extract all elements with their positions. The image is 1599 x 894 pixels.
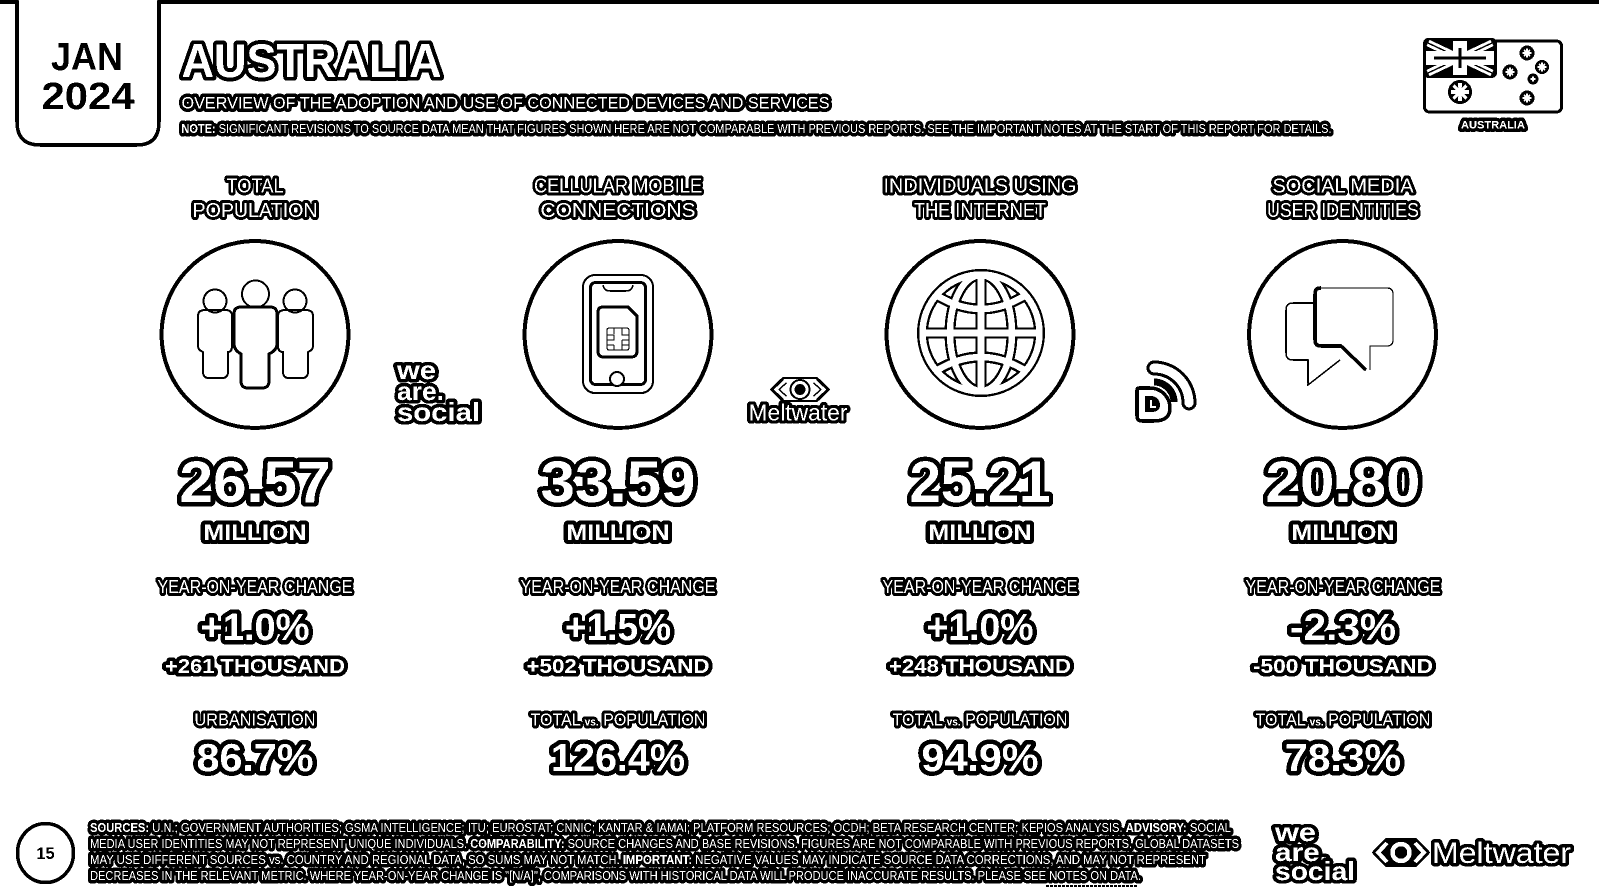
icon: speech bubbles bbox=[1249, 241, 1436, 428]
logo: we are social footer: are. bbox=[1275, 837, 1328, 867]
heading: social media user identities bbox=[1267, 174, 1419, 222]
change absolute: +261 THOUSAND bbox=[165, 655, 345, 678]
label: urbanisation: URBANISATION bbox=[194, 710, 316, 730]
heading: social media user identities: SOCIAL MEDIA bbox=[1272, 174, 1414, 198]
footer sources and notes: MAY USE DIFFERENT SOURCES vs. COUNTRY AND REGIONAL DATA, SO SUMS MAY NOT MATCH. IMPORTANT: NEGATIVE VALUES MAY INDICATE SOURCE DATA CORRECTIONS, AND MAY NOT REPRESENT bbox=[90, 852, 1206, 867]
title: AUSTRALIA bbox=[182, 34, 442, 87]
page number: 15 bbox=[36, 845, 55, 863]
figure: total population: 26.57 bbox=[180, 450, 330, 515]
logo: meltwater eye and wordmark: Meltwater bbox=[748, 400, 848, 426]
heading: cellular mobile connections: CELLULAR MOBILE bbox=[534, 174, 702, 198]
heading: individuals using the internet: THE INTERNET bbox=[914, 199, 1046, 222]
change absolute: -500 THOUSAND bbox=[1253, 655, 1433, 678]
logo: meltwater footer: Meltwater bbox=[1432, 837, 1571, 870]
date tab: JAN bbox=[51, 36, 123, 79]
urbanisation value: 86.7% bbox=[196, 737, 314, 780]
footer sources and notes: DECREASES IN THE RELEVANT METRIC. WHERE YEAR-ON-YEAR CHANGE IS "[N/A]", COMPARISONS WITH HISTORICAL DATA WILL PRODUCE INACCURATE RESULTS. PLEASE SEE NOTES ON DATA. bbox=[90, 868, 1141, 883]
date tab: 2024 bbox=[42, 76, 134, 118]
total vs population value: 94.9% bbox=[922, 737, 1038, 780]
icon: globe bbox=[886, 241, 1074, 428]
label: year-on-year: YEAR-ON-YEAR CHANGE bbox=[158, 576, 352, 597]
unit: MILLION bbox=[928, 520, 1032, 545]
heading: individuals using the internet: INDIVIDUALS USING bbox=[884, 174, 1076, 198]
figure: social media users: 20.80 bbox=[1266, 450, 1420, 515]
icon: australian flag bbox=[1423, 38, 1562, 112]
heading: total population: TOTAL bbox=[226, 174, 284, 198]
icon: people bbox=[162, 241, 348, 428]
change percent: -2.3% bbox=[1290, 607, 1396, 649]
heading: individuals using the internet bbox=[884, 174, 1076, 222]
heading: cellular mobile connections bbox=[534, 174, 702, 222]
label: total vs population: TOTAL vs. POPULATION bbox=[1256, 710, 1430, 730]
logo: we are social footer bbox=[1274, 817, 1355, 886]
label: total vs population: TOTAL vs. POPULATION bbox=[530, 710, 706, 730]
footer sources and notes: MEDIA USER IDENTITIES MAY NOT REPRESENT UNIQUE INDIVIDUALS. COMPARABILITY: SOURCE CHANGES AND BASE REVISIONS. FIGURES ARE NOT COMPARABLE WITH PREVIOUS REPORTS. GLOBAL DATASETS bbox=[90, 836, 1239, 851]
footer sources and notes: SOURCES: U.N.; GOVERNMENT AUTHORITIES; GSMA INTELLIGENCE; ITU; EUROSTAT; CNNIC; KANTAR & IAMAI; PLATFORM RESOURCES; OCDH; BETA RESEARCH CENTER; KEPIOS ANALYSIS. ADVISORY: SOCIAL bbox=[90, 820, 1231, 835]
panel: individuals using the internet bbox=[882, 174, 1078, 780]
logo: we are social: we bbox=[396, 355, 436, 385]
heading: social media user identities: USER IDENTITIES bbox=[1267, 199, 1419, 222]
heading: total population: POPULATION bbox=[192, 199, 318, 222]
unit: MILLION bbox=[1292, 520, 1394, 545]
unit: MILLION bbox=[566, 520, 670, 545]
date tab bbox=[0, 2, 1599, 145]
figure: mobile connections: 33.59 bbox=[540, 450, 696, 515]
label: year-on-year: YEAR-ON-YEAR CHANGE bbox=[882, 576, 1078, 597]
logo: we are social: social bbox=[397, 397, 480, 427]
logo: we are social bbox=[396, 355, 480, 427]
total vs population value: 126.4% bbox=[551, 737, 685, 780]
logo: we are social footer: social bbox=[1275, 856, 1355, 886]
icon: phone with SIM bbox=[524, 241, 712, 428]
panel: social media user identities bbox=[1246, 174, 1440, 780]
logo: meltwater footer bbox=[1373, 837, 1571, 870]
heading: cellular mobile connections: CONNECTIONS bbox=[540, 199, 696, 222]
flag label: AUSTRALIA bbox=[1461, 120, 1525, 132]
label: year-on-year: YEAR-ON-YEAR CHANGE bbox=[520, 576, 716, 597]
panel: total population bbox=[158, 174, 352, 780]
logo: meltwater eye and wordmark bbox=[748, 378, 848, 426]
change percent: +1.5% bbox=[565, 607, 671, 649]
unit: MILLION bbox=[204, 520, 306, 545]
figure: internet users: 25.21 bbox=[910, 450, 1050, 515]
change absolute: +502 THOUSAND bbox=[526, 655, 710, 678]
change percent: +1.0% bbox=[200, 607, 310, 649]
label: year-on-year: YEAR-ON-YEAR CHANGE bbox=[1246, 576, 1440, 597]
footer sources and notes bbox=[90, 820, 1239, 886]
panel: cellular mobile connections bbox=[520, 174, 716, 780]
change absolute: +248 THOUSAND bbox=[889, 655, 1071, 678]
change percent: +1.0% bbox=[926, 607, 1034, 649]
total vs population value: 78.3% bbox=[1285, 737, 1401, 780]
heading: total population bbox=[192, 174, 318, 222]
page number bbox=[18, 824, 74, 882]
note: NOTE: SIGNIFICANT REVISIONS TO SOURCE DATA MEAN THAT FIGURES SHOWN HERE ARE NOT COMPARABLE WITH PREVIOUS REPORTS. SEE THE IMPORTANT NOTES AT THE START OF THIS REPORT FOR DETAILS. bbox=[182, 122, 1332, 136]
logo: we are social footer: we bbox=[1274, 817, 1316, 847]
logo: we are social: are. bbox=[397, 376, 444, 406]
label: total vs population: TOTAL vs. POPULATION bbox=[892, 710, 1068, 730]
subtitle: OVERVIEW OF THE ADOPTION AND USE OF CONNECTED DEVICES AND SERVICES bbox=[182, 94, 830, 112]
logo: datareportal bbox=[1137, 368, 1189, 421]
